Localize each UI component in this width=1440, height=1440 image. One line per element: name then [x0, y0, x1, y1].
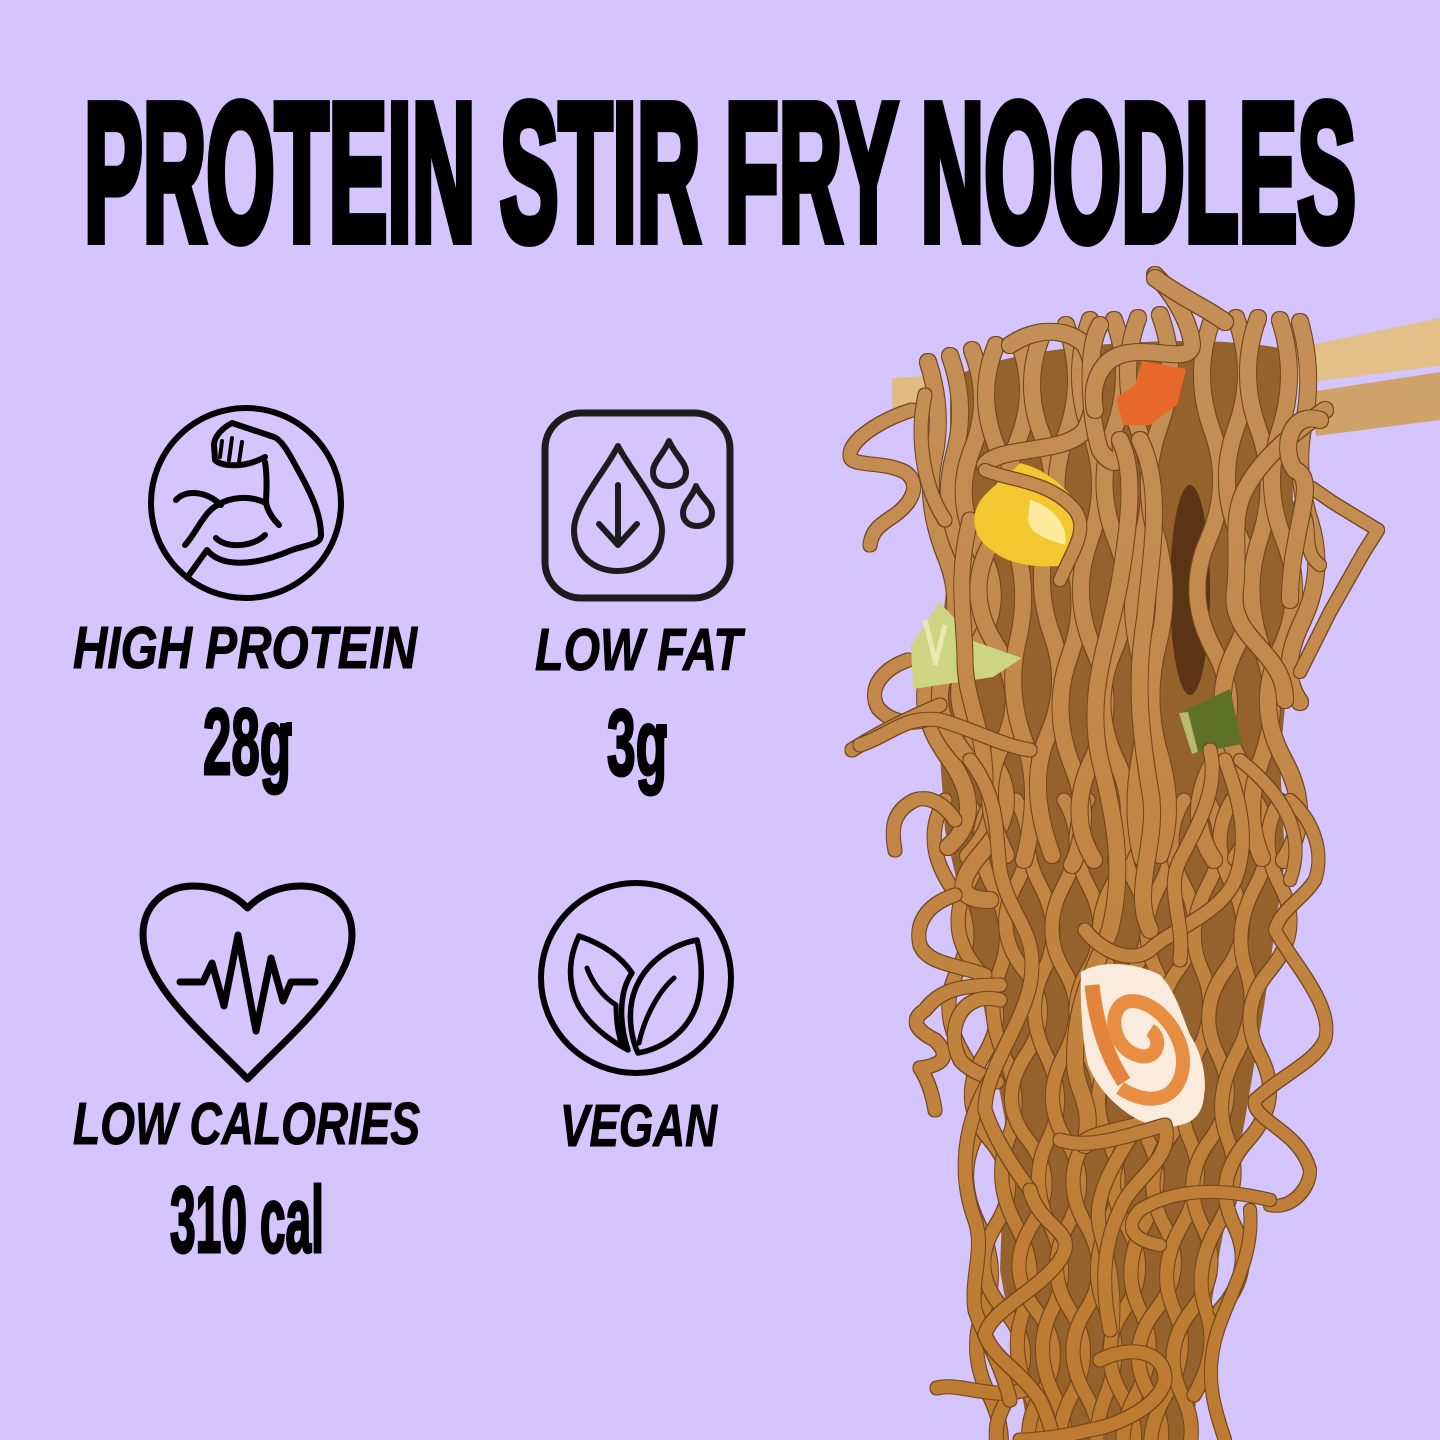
corn piece	[974, 463, 1083, 566]
strand over corn	[985, 470, 1080, 580]
strand over cabbage	[962, 520, 985, 780]
icon: heart with pulse	[143, 886, 352, 1079]
mid and lower front strands	[860, 719, 1242, 1440]
zucchini piece	[1179, 689, 1242, 754]
cabbage piece	[911, 602, 1022, 689]
value: 28g: 28g	[203, 689, 291, 794]
label: vegan: VEGAN	[560, 1093, 718, 1159]
lower strand layer	[934, 800, 1290, 1440]
chopsticks	[892, 318, 1440, 436]
dark shadow pocket	[1170, 485, 1210, 695]
carrot piece	[1116, 361, 1186, 425]
photo: noodles lifted by chopsticks	[850, 275, 1440, 1440]
narutomaki fish cake	[1081, 964, 1205, 1127]
left curl strands	[850, 395, 1025, 1400]
value: 3g	[607, 690, 667, 795]
value: 28g	[203, 689, 292, 794]
icon: flexed muscle in circle	[151, 408, 341, 598]
upper strand layer	[925, 315, 1316, 900]
label: high protein: HIGH PROTEIN	[73, 615, 418, 681]
text: 310 cal	[170, 1167, 324, 1272]
icon: vegan leaves in circle	[541, 883, 731, 1073]
right side strands	[1132, 488, 1378, 1440]
icon: low fat drops	[545, 413, 730, 598]
noodle core mass	[935, 341, 1295, 1440]
value: 3g: 3g	[607, 690, 667, 795]
label: low calories: LOW CALORIES	[73, 1091, 420, 1157]
upper front strands	[985, 275, 1325, 1145]
strand under fish cake	[1060, 1125, 1166, 1330]
label: low fat: LOW FAT	[535, 617, 746, 683]
